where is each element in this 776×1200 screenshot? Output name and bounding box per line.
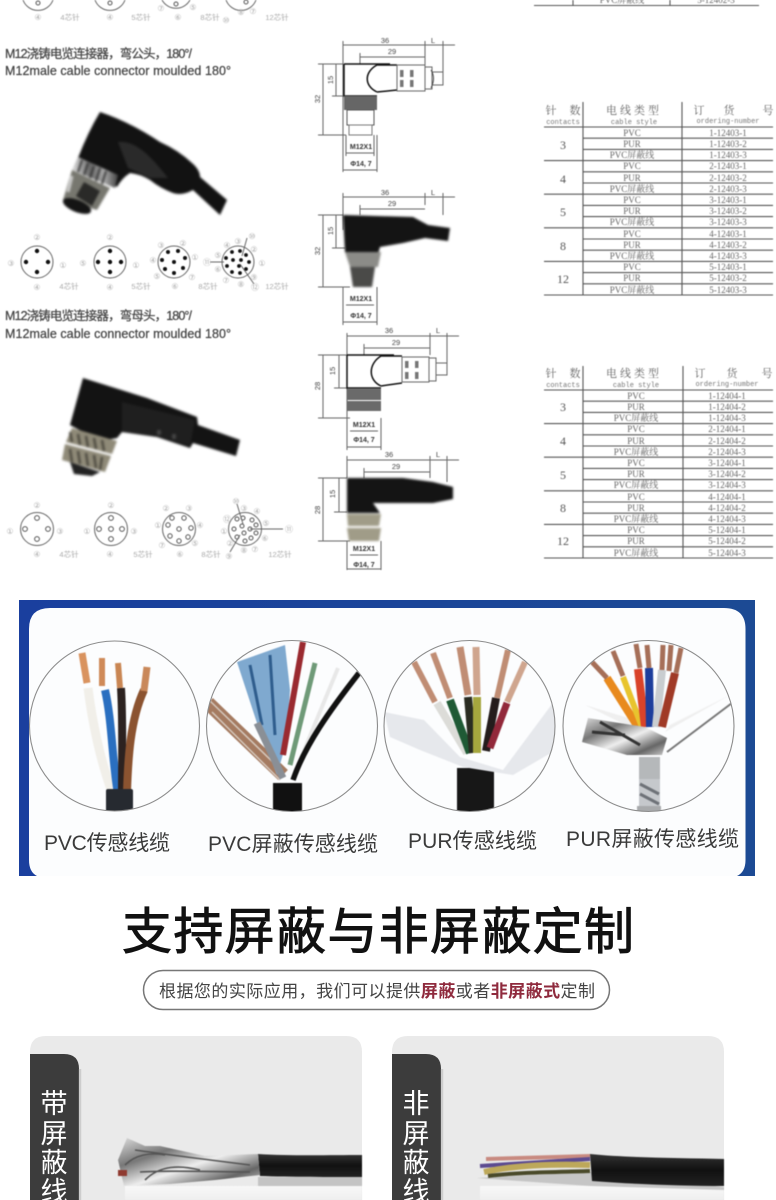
pin diagrams: male: ④ (149, 256, 157, 265)
caption: male connector: M12浇铸电览连接器，弯公头，180°/ (5, 46, 193, 61)
pin diagrams: female: ① (83, 527, 91, 536)
ordering table 12403: 4 (560, 172, 566, 186)
tab: shielded label: 带 (40, 1089, 68, 1119)
ordering table 12403: 货 (724, 103, 736, 117)
cropped pin diagrams: ⑧ (237, 8, 245, 17)
pin diagrams: female: ① (220, 527, 228, 536)
ordering table 12403: PVC (623, 262, 641, 272)
dimension drawing: female outline 28mm (313, 326, 459, 450)
pin diagrams: male: ⑤ (79, 259, 87, 268)
ordering table 12404: PVC (627, 424, 645, 434)
pin diagrams: female: 5芯针 (133, 549, 153, 559)
pin diagrams: female: ② (162, 504, 170, 513)
pin diagrams: male: ⑦ (222, 276, 230, 285)
ordering table 12404: 电线类型 (606, 366, 662, 380)
ordering table 12404: 1-12404-1 (708, 391, 746, 401)
ordering table 12403: 5-12403-3 (709, 285, 747, 295)
pin diagrams: female: ④ (106, 550, 114, 559)
product photo: female right-angle connector (62, 378, 240, 476)
pin diagrams: female: ② (33, 501, 41, 510)
panel: unshielded cable (392, 1036, 724, 1200)
pin diagrams: male: ④ (33, 283, 41, 292)
pin diagrams: female: ④ (196, 521, 204, 530)
pin diagrams: female: ⑨ (225, 552, 233, 561)
ordering table 12403: 4-12403-1 (709, 229, 747, 239)
cropped pin diagrams: 5芯针 (131, 12, 151, 22)
dimension drawing: female photo 28mm (313, 450, 459, 570)
ordering table 12403: PUR (623, 206, 641, 216)
dimension drawing: male outline 32mm: Φ14, 7 (350, 161, 372, 168)
caption: female connector: M12male cable connector moulded 180° (5, 327, 231, 341)
pin diagrams: male (7, 232, 289, 292)
ordering table 12404: PUR (627, 402, 645, 412)
cropped pin diagrams: ④ (106, 13, 114, 22)
pin diagrams: female: ① (154, 521, 162, 530)
ordering table 12404: PUR (627, 469, 645, 479)
ordering table 12404: 2-12404-2 (708, 436, 746, 446)
cropped pin diagrams: ⑤ (189, 3, 197, 12)
ordering table 12403: PVC屏蔽线 (610, 183, 654, 194)
ordering table 12404: 4-12404-3 (708, 514, 746, 524)
ordering table 12404 (544, 366, 773, 558)
pin diagrams: female: ③ (240, 504, 248, 513)
cable type labels (44, 828, 739, 856)
ordering table 12404: contacts (546, 382, 580, 390)
ordering table 12403: 1-12403-3 (709, 150, 747, 160)
pin diagrams: male: ① (258, 259, 266, 268)
pin diagrams: female: ⑦ (251, 545, 259, 554)
pin diagrams: female: ⑪ (285, 525, 293, 534)
ordering table 12404: 货 (726, 366, 738, 380)
dimension drawing: female photo 28mm: M12X1 (353, 546, 375, 553)
ordering table 12404: PVC屏蔽线 (614, 479, 658, 490)
panel: cable types banner (19, 600, 755, 876)
pin diagrams: male: ④ (106, 283, 114, 292)
dimension drawing: male photo 32mm: 15 (326, 227, 335, 235)
ordering table 12404: PVC (627, 458, 645, 468)
ordering table 12404: 3-12404-1 (708, 458, 746, 468)
dimension drawing: male photo 32mm: Φ14, 7 (350, 313, 372, 320)
cropped pin diagrams: ⑦ (157, 4, 165, 13)
ordering table 12403: 4-12403-2 (709, 240, 747, 250)
pin diagrams: female: ⑧ (240, 546, 248, 555)
dimension drawing: female outline 28mm: M12X1 (353, 422, 375, 429)
ordering table 12404: 5-12404-2 (708, 536, 746, 546)
ordering table 12404: 4-12404-1 (708, 492, 746, 502)
pin diagrams: male: ④ (223, 241, 231, 250)
ordering table 12403: 3 (560, 138, 566, 152)
pin diagrams: male: ② (250, 245, 258, 254)
ordering table 12403: PVC (623, 128, 641, 138)
ordering table 12404: PUR (627, 536, 645, 546)
ordering table 12403: 2-12403-3 (709, 184, 747, 194)
ordering table 12404: 5-12404-3 (708, 548, 746, 558)
dimension drawing: male outline 32mm: 32 (313, 95, 322, 103)
ordering table 12403: 电线类型 (606, 103, 662, 117)
pin diagrams: female: ⑩ (232, 497, 240, 506)
pin diagrams: female: ② (107, 501, 115, 510)
product photo: male right-angle connector (61, 112, 227, 217)
pin diagrams: female: ② (226, 539, 234, 548)
dimension drawing: male photo 32mm: 32 (313, 247, 322, 255)
cropped pin diagrams: 4芯针 (60, 12, 80, 22)
ordering table 12403: 5-12403-1 (709, 262, 747, 272)
ordering table 12404: PVC屏蔽线 (614, 513, 658, 524)
caption: male connector: M12male cable connector moulded 180° (5, 64, 231, 78)
icon: PUR shielded sensor cable (582, 644, 732, 814)
ordering table 12403: contacts (546, 119, 580, 127)
dimension drawing: male photo 32mm: L (431, 188, 435, 197)
ordering table 12403: 5-12403-2 (709, 273, 747, 283)
ordering table 12404: cable style (613, 382, 659, 390)
pin diagrams: female: ⑦ (158, 541, 166, 550)
pin diagrams: male: ③ (157, 241, 165, 250)
pin diagrams: male: 8芯针 (198, 281, 218, 291)
ordering table 12403: PUR (623, 273, 641, 283)
ordering table 12403: PUR (623, 173, 641, 183)
pin diagrams: female: ① (6, 527, 14, 536)
cropped pin diagrams: ⑦ (249, 7, 257, 16)
cropped pin diagrams: ⑩ (222, 16, 230, 25)
pin diagrams: male: ③ (234, 237, 242, 246)
dimension drawing: male outline 32mm: 36 (381, 36, 389, 45)
pin diagrams: male: ⑩ (248, 232, 256, 241)
ordering table 12404: 4-12404-2 (708, 503, 746, 513)
ordering table 12404: 5 (560, 468, 566, 482)
pin diagrams: female: ④ (33, 550, 41, 559)
ordering table 12404: 12 (557, 534, 569, 548)
ordering table 12403: PVC屏蔽线 (610, 149, 654, 160)
ordering table 12404: 数 (570, 366, 580, 380)
ordering table 12403: 数 (570, 103, 580, 117)
ordering table 12404: PVC (627, 525, 645, 535)
pin diagrams: male: ⑦ (188, 273, 196, 282)
pin diagrams: male: 5芯针 (131, 281, 151, 291)
ordering table 12404: 号 (762, 367, 772, 380)
pin diagrams: female: ④ (253, 507, 261, 516)
pin diagrams: female: ③ (185, 504, 193, 513)
caption: male connector (5, 46, 231, 78)
ordering table 12404: PUR (627, 436, 645, 446)
icon: PVC shielded sensor cable (208, 642, 359, 815)
circle outlines (30, 640, 734, 812)
cropped pin diagrams (23, 0, 289, 25)
dimension drawing: male outline 32mm: 29 (388, 47, 396, 56)
table remnant at top (534, 0, 759, 6)
caption: female connector (5, 308, 231, 341)
dimension drawing: female photo 28mm: 28 (313, 506, 322, 514)
pin diagrams: male: ① (132, 261, 140, 270)
cable type labels: PVC屏蔽传感线缆 (208, 833, 378, 856)
icon: PVC sensor cable (82, 653, 147, 814)
ordering table 12404: PVC屏蔽线 (614, 547, 658, 558)
pin diagrams: male: 4芯针 (59, 281, 79, 291)
ordering table 12403: 3-12403-2 (709, 206, 747, 216)
pin diagrams: male: ③ (7, 259, 15, 268)
ordering table 12404: PVC (627, 391, 645, 401)
dimension drawing: female photo 28mm: Φ14, 7 (353, 562, 375, 569)
ordering table 12403: PVC屏蔽线 (610, 284, 654, 295)
ordering table 12404: PVC (627, 492, 645, 502)
ordering table 12403: 1-12403-2 (709, 139, 747, 149)
dimension drawing: male photo 32mm (313, 188, 455, 325)
dimension drawing: female photo 28mm: 15 (328, 490, 337, 498)
ordering table 12404: 5-12404-1 (708, 525, 746, 535)
ordering table 12403 (544, 102, 774, 295)
panel: shielded cable (30, 1036, 362, 1200)
pin diagrams: female (6, 497, 293, 561)
ordering table 12403: 2-12403-1 (709, 161, 747, 171)
ordering table 12403: 2-12403-2 (709, 173, 747, 183)
pin diagrams: male: ① (191, 253, 199, 262)
dimension drawing: female photo 28mm: L (436, 450, 440, 459)
tab: shielded label: 屏 (40, 1119, 68, 1149)
ordering table 12403: PUR (623, 240, 641, 250)
cropped pin diagrams: 12芯针 (265, 12, 289, 22)
pin diagrams: male: ⑧ (237, 280, 245, 289)
ordering table 12403: 号 (762, 104, 774, 117)
cropped pin diagrams: ④ (34, 13, 42, 22)
ordering table 12403: 订 (694, 104, 704, 117)
ordering table 12404: 8 (560, 501, 566, 515)
ordering table 12403: 1-12403-1 (709, 128, 747, 138)
ordering table 12403: 3-12403-1 (709, 195, 747, 205)
tab: unshielded label: 非 (402, 1089, 430, 1119)
pin diagrams: female: ③ (56, 527, 64, 536)
cable type labels: PUR传感线缆 (408, 830, 537, 853)
pin diagrams: male: 12芯针 (265, 281, 289, 291)
pin diagrams: male: ⑤ (153, 272, 161, 281)
ordering table 12403: PVC屏蔽线 (610, 216, 654, 227)
ordering table 12403: cable style (611, 119, 657, 127)
pin diagrams: female: ⑤ (262, 519, 270, 528)
tab: shielded label: 蔽 (40, 1148, 68, 1178)
pin diagrams: male: ① (59, 261, 67, 270)
pin diagrams: female: ⑫ (223, 515, 231, 524)
dimension drawing: male photo 32mm: M12X1 (350, 296, 372, 303)
subtitle pill: 根据您的实际应用，我们可以提供屏蔽或者非屏蔽式定制 (159, 982, 595, 1001)
tab: shielded label (30, 1054, 80, 1200)
dimension drawing: female outline 28mm: L (436, 326, 440, 335)
pin diagrams: male: ② (33, 233, 41, 242)
ordering table 12404: 3 (560, 400, 566, 414)
ordering table 12403: PUR (623, 139, 641, 149)
ordering table 12403: PVC (623, 195, 641, 205)
icon: unshielded cable (479, 1153, 725, 1194)
dimension drawing: male outline 32mm (313, 36, 455, 172)
ordering table 12404: 3-12404-2 (708, 469, 746, 479)
pin diagrams: female: ⑥ (176, 550, 184, 559)
pin diagrams: female: 12芯针 (268, 549, 292, 559)
pin diagrams: male: ⑤ (214, 251, 222, 260)
pin diagrams: female: ③ (130, 527, 138, 536)
dimension drawing: female photo 28mm: 36 (385, 450, 393, 459)
cropped pin diagrams: 8芯针 (200, 12, 220, 22)
dimension drawing: male outline 32mm: 15 (326, 76, 335, 84)
ordering table 12403: 4-12403-3 (709, 251, 747, 261)
dimension drawing: female outline 28mm: 28 (313, 382, 322, 390)
ordering table 12404: PUR (627, 503, 645, 513)
ordering table 12403: PVC (623, 229, 641, 239)
icon: PUR sensor cable (384, 647, 556, 814)
top section: cropped pin diagrams and table remnant (5, 0, 774, 570)
pin diagrams: female: 8芯针 (201, 549, 221, 559)
cable type labels: PUR屏蔽传感线缆 (566, 828, 739, 851)
ordering table 12404: 针 (546, 366, 556, 380)
pin diagrams: male: ⑥ (214, 265, 222, 274)
ordering table 12404: 2-12404-3 (708, 447, 746, 457)
dimension drawing: female outline 28mm: 15 (328, 367, 337, 375)
dimension drawing: female outline 28mm: 36 (385, 326, 393, 335)
ordering table 12403: 8 (560, 239, 566, 253)
caption: female connector: M12浇铸电览连接器，弯母头，180°/ (5, 308, 193, 323)
title: 支持屏蔽与非屏蔽定制 (122, 904, 634, 960)
tab: unshielded label: 蔽 (402, 1148, 430, 1178)
pin diagrams: female: ⑤ (191, 539, 199, 548)
tab: unshielded label (392, 1054, 442, 1200)
dimension drawing: female photo 28mm: 29 (392, 462, 400, 471)
ordering table 12404: PVC屏蔽线 (614, 412, 658, 423)
cable type labels: PVC传感线缆 (44, 832, 170, 855)
ordering table 12404: 3-12404-3 (708, 480, 746, 490)
pin diagrams: male: ⑨ (250, 273, 258, 282)
pin diagrams: male: ⑥ (171, 282, 179, 291)
ordering table 12403: 针 (546, 103, 556, 117)
ordering table 12404: 4 (560, 434, 566, 448)
pin diagrams: male: ② (179, 239, 187, 248)
ordering table 12403: 3-12403-3 (709, 217, 747, 227)
ordering table 12404: 2-12404-1 (708, 424, 746, 434)
pin diagrams: female: ⑥ (261, 534, 269, 543)
ordering table 12404: PVC屏蔽线 (614, 446, 658, 457)
ordering table 12403: PVC屏蔽线 (610, 250, 654, 261)
pin diagrams: male: ⑫ (251, 283, 259, 292)
pin diagrams: female: 4芯针 (59, 549, 79, 559)
ordering table 12403: 12 (557, 272, 569, 286)
dimension drawing: male outline 32mm: M12X1 (350, 144, 372, 151)
ordering table 12403: PVC (623, 161, 641, 171)
ordering table 12404: ordering-number (695, 381, 759, 389)
dimension drawing: female outline 28mm: 29 (392, 338, 400, 347)
cropped pin diagrams: ⑥ (174, 13, 182, 22)
dimension drawing: male outline 32mm: L (431, 36, 435, 45)
ordering table 12403: 5 (560, 205, 566, 219)
icon: shielded cable with foil (118, 1138, 362, 1200)
dimension drawing: male photo 32mm: 36 (381, 188, 389, 197)
ordering table 12404: 订 (694, 367, 706, 380)
subtitle pill (144, 970, 610, 1010)
dimension drawing: female outline 28mm: Φ14, 7 (353, 437, 375, 444)
ordering table 12404: 1-12404-2 (708, 402, 746, 412)
ordering table 12403: ordering-number (696, 118, 760, 126)
pin diagrams: male: ② (106, 233, 114, 242)
tab: unshielded label: 屏 (402, 1119, 430, 1149)
pin diagrams: male: ⑪ (203, 258, 211, 267)
dimension drawing: male photo 32mm: 29 (388, 199, 396, 208)
ordering table 12404: 1-12404-3 (708, 413, 746, 423)
